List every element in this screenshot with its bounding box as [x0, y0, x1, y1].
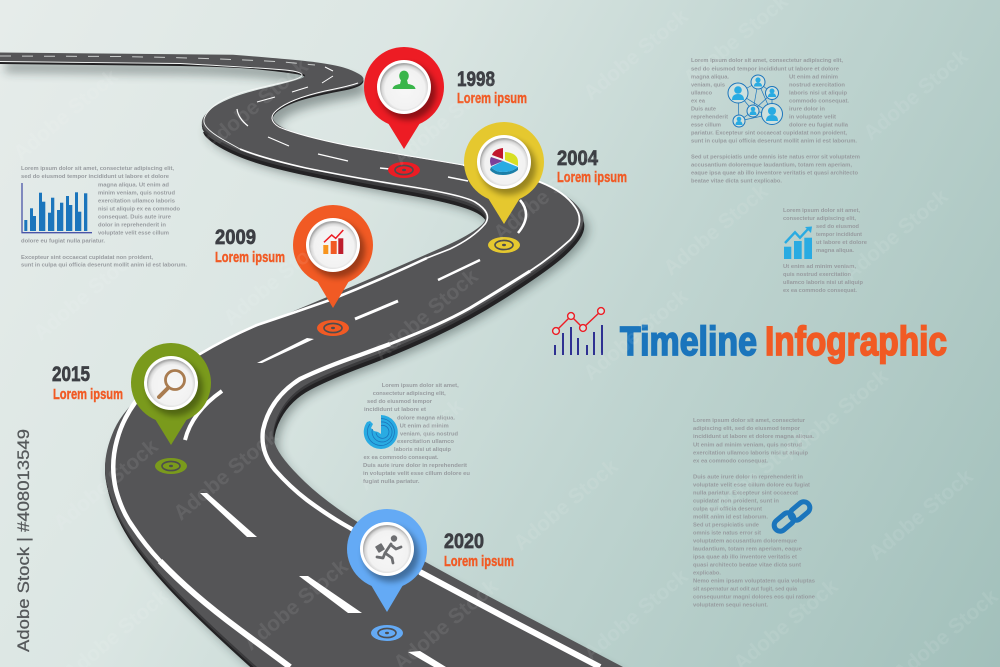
panel: text with network icon: eaque ipsa quae ab illo inventore veritatis et quasi architecto: [691, 170, 858, 176]
panel: text with bar chart: voluptate velit esse cillum: [98, 230, 169, 236]
watermark: Adobe Stock: [49, 435, 163, 535]
panel: text with bar chart: [21, 166, 187, 268]
panel: text with link icon: omnis iste natus error sit: [693, 530, 761, 536]
panel: text with growth icon: [783, 208, 868, 294]
panel: text with network icon: ex ea: [691, 98, 706, 104]
icon: magnifier: [159, 370, 184, 397]
panel: text with link icon: Sed ut perspiciatis unde: [693, 522, 760, 528]
panel: text with network icon: dolore eu fugiat nulla: [789, 122, 849, 128]
label: 2009: Lorem ipsum: [215, 249, 285, 266]
panel: text with link icon: adipiscing elit, sed do eiusmod tempor: [693, 426, 801, 432]
panel: text with network icon: irure dolor in: [789, 106, 825, 112]
target marker: 2020: [371, 625, 403, 641]
label: 2004: 2004: [557, 147, 598, 170]
panel: text with radial icon: sed do eiusmod tempor: [367, 399, 433, 405]
panel: text with radial icon: incididunt ut labore et: [364, 407, 426, 413]
panel: text with link icon: quasi architecto beatae vitae dicta sunt: [693, 562, 801, 568]
panel: text with bar chart: nisi ut aliquip ex ea commodo: [98, 206, 180, 212]
watermark: Adobe Stock: [859, 45, 973, 145]
panel: text with bar chart: exercitation ullamco laboris: [98, 198, 175, 204]
panel: text with link icon: ipsa quae ab illo inventore veritatis et: [693, 554, 797, 560]
panel: text with link icon: incididunt ut labore et dolore magna aliqua.: [693, 434, 814, 440]
panel: text with bar chart: dolor in reprehenderit in: [98, 222, 166, 228]
watermark: Adobe Stock: [839, 185, 953, 285]
panel: text with radial icon: veniam, quis nostrud: [400, 431, 458, 437]
label: 2009: [215, 226, 285, 266]
panel: text with link icon: Duis aute irure dolor in reprehenderit in: [693, 474, 803, 480]
watermark: Adobe Stock: [389, 70, 503, 170]
panel: text with bar chart: magna aliqua. Ut enim ad: [98, 182, 169, 188]
title text: Infographic: [765, 318, 947, 364]
panel: text with growth icon: ullamco laboris nisi ut aliquip: [783, 280, 863, 286]
watermark: Adobe Stock: [369, 265, 483, 365]
target marker: 2009: [317, 320, 349, 336]
watermark: Adobe Stock: [169, 425, 283, 525]
panel: text with growth icon: quis nostrud exercitation: [783, 272, 851, 278]
panel: text with growth icon: Lorem ipsum dolor sit amet,: [783, 208, 860, 214]
panel: text with growth icon: Ut enim ad minim veniam,: [783, 264, 856, 270]
watermark: Adobe Stock: [579, 565, 693, 665]
watermark: Adobe Stock: [864, 465, 978, 565]
panel: text with network icon: Sed ut perspiciatis unde omnis iste natus error sit voluptatem: [691, 154, 860, 160]
pin: 1998 person: [364, 47, 444, 149]
watermark: Adobe Stock: [9, 65, 123, 165]
panel: text with radial icon: [363, 383, 470, 485]
panel: text with network icon: Ut enim ad minim: [789, 75, 838, 81]
panel: text with network icon: magna aliqua.: [691, 75, 729, 81]
watermark: Adobe Stock: [489, 145, 603, 245]
panel: text with radial icon: fugiat nulla pariatur.: [363, 479, 420, 485]
icon: growth chart: [784, 226, 812, 259]
label: 2015: Lorem ipsum: [53, 386, 123, 403]
label: 1998: [457, 68, 527, 107]
pin: 2015 magnifier: [131, 343, 211, 445]
label: 2015: 2015: [52, 363, 90, 386]
panel: text with radial icon: Duis aute irure dolor in reprehenderit: [363, 463, 467, 469]
title text: Timeline: [620, 318, 757, 364]
panel: text with bar chart: minim veniam, quis nostrud: [98, 190, 175, 196]
pin: 2020 runner: [347, 509, 427, 612]
watermark: Adobe Stock: [579, 5, 693, 105]
panel: text with growth icon: consectetur adipiscing elit,: [783, 216, 856, 222]
title block: [553, 308, 947, 364]
panel: text with radial icon: dolore magna aliqua.: [397, 415, 455, 421]
label: 2020: Lorem ipsum: [444, 553, 514, 570]
road edge lines: [0, 62, 600, 667]
panel: text with network icon: pariatur. Excepteur sint occaecat cupidatat non proident,: [691, 130, 847, 136]
panel: text with radial icon: exercitation ullamco: [397, 439, 454, 445]
panel: text with network icon: reprehenderit: [691, 115, 728, 121]
panel: text with network icon: laboris nisi ut aliquip: [789, 90, 847, 96]
panel: text with growth icon: tempor incididunt: [816, 232, 862, 238]
label: 2004: Lorem ipsum: [557, 169, 627, 186]
watermark: Adobe Stock: [699, 425, 813, 525]
panel: text with bar chart: Lorem ipsum dolor sit amet, consectetur adipiscing elit,: [21, 166, 174, 172]
label: 1998: 1998: [457, 68, 495, 91]
icon: title line and bar chart: [553, 308, 604, 355]
icon: pie chart: [490, 148, 518, 175]
label: 2020: [444, 530, 514, 570]
panel: text with growth icon: ex ea commodo consequat.: [783, 288, 857, 294]
panel: text with link icon: voluptate velit esse cillum dolore eu fugiat: [693, 482, 810, 488]
panel: text with network icon: [691, 58, 860, 184]
panel: text with link icon: mollit anim id est laborum.: [693, 514, 768, 520]
label: 2020: 2020: [444, 530, 484, 553]
panel: text with bar chart: Excepteur sint occaecat cupidatat non proident,: [21, 255, 153, 261]
panel: text with link icon: exercitation ullamco laboris nisi ut aliquip: [693, 450, 808, 456]
panel: text with radial icon: ex ea commodo consequat.: [364, 455, 439, 461]
panel: text with network icon: accusantium doloremque laudantium, totam rem aperiam,: [691, 162, 852, 168]
panel: text with link icon: voluptatem sequi nesciunt.: [693, 602, 768, 608]
panel: text with growth icon: sed do eiusmod: [816, 224, 859, 230]
label: 2004: [557, 147, 627, 186]
target marker: 1998: [388, 162, 420, 178]
pin: 2004 pie chart: [464, 122, 544, 224]
panel: text with link icon: cupidatat non proident, sunt in: [693, 498, 779, 504]
watermark: Adobe Stock: [779, 365, 893, 465]
watermark: Adobe Stock: [354, 395, 468, 495]
watermark: Adobe Stock: [579, 285, 693, 385]
panel: text with link icon: Lorem ipsum dolor sit amet, consectetur: [693, 418, 806, 424]
panel: text with bar chart: sed do eiusmod tempor incididunt ut labore et dolore: [21, 174, 170, 180]
panel: text with radial icon: laboris nisi ut aliquip: [394, 447, 451, 453]
watermark: Adobe Stock: [199, 55, 313, 155]
icon: people network: [728, 75, 782, 127]
watermark: Adobe Stock: [509, 455, 623, 555]
panel: text with radial icon: Lorem ipsum dolor sit amet,: [382, 383, 459, 389]
panel: text with link icon: ex ea commodo consequat.: [693, 458, 768, 464]
target marker: 2015: [155, 458, 187, 474]
panel: text with network icon: nostrud exercitation: [789, 82, 845, 88]
watermark: Adobe Stock: [219, 230, 333, 330]
vertical stock id text: Adobe Stock | #408013549: [15, 429, 33, 652]
panel: text with link icon: explicabo.: [693, 570, 721, 576]
panel: text with network icon: esse cillum: [691, 122, 721, 128]
panel: text with link icon: Ut enim ad minim veniam, quis nostrud: [693, 442, 802, 448]
panel: text with network icon: Lorem ipsum dolor sit amet, consectetur adipiscing elit,: [691, 58, 843, 64]
target marker: 2004: [488, 237, 520, 253]
panel: text with link icon: [693, 418, 816, 608]
panel: text with network icon: veniam, quis: [691, 82, 725, 88]
panel: text with network icon: commodo consequat.: [789, 98, 849, 104]
panel: text with radial icon: Ut enim ad minim: [400, 423, 449, 429]
panel: text with growth icon: ut labore et dolore: [816, 240, 868, 246]
road centre dashes: [0, 56, 526, 667]
panel: text with network icon: Duis aute: [691, 106, 717, 112]
icon: growth bars: [323, 230, 343, 254]
panel: text with link icon: Nemo enim ipsam voluptatem quia voluptas: [693, 578, 815, 584]
panel: text with radial icon: consectetur adipiscing elit,: [373, 391, 446, 397]
panel: text with growth icon: magna aliqua.: [816, 248, 854, 254]
label: 1998: Lorem ipsum: [457, 90, 527, 107]
panel: text with bar chart: dolore eu fugiat nulla pariatur.: [21, 238, 105, 244]
watermark: Adobe Stock: [29, 245, 143, 345]
icon: chain link: [772, 499, 812, 534]
panel: text with radial icon: in voluptate velit esse cillum dolore eu: [363, 471, 470, 477]
panel: text with network icon: sunt in culpa qui officia deserunt mollit anim id est laborum.: [691, 138, 857, 144]
panel: text with link icon: laudantium, totam rem aperiam, eaque: [693, 546, 803, 552]
icon: runner: [376, 535, 401, 563]
watermark: Adobe Stock: [659, 180, 773, 280]
panel: text with link icon: nulla pariatur. Excepteur sint occaecat: [693, 490, 798, 496]
panel: text with link icon: sit aspernatur aut odit aut fugit, sed quia: [693, 586, 798, 592]
watermark: Adobe Stock: [239, 555, 353, 655]
road: [0, 52, 645, 667]
panel: text with link icon: voluptatem accusantium doloremque: [693, 538, 798, 544]
pin: 2009 growth bars: [293, 205, 373, 308]
icon: person: [392, 71, 416, 89]
panel: text with link icon: culpa qui officia deserunt: [693, 506, 762, 512]
label: 2015: [52, 363, 123, 403]
icon: radial chart: [364, 415, 398, 449]
panel: text with network icon: beatae vitae dicta sunt explicabo.: [691, 178, 782, 184]
panel: text with network icon: sed do eiusmod tempor incididunt ut labore et dolore: [691, 66, 840, 72]
label: 2009: 2009: [215, 226, 256, 249]
panel: text with link icon: consequuntur magni dolores eos qui ratione: [693, 594, 816, 600]
panel: text with network icon: ullamco: [691, 90, 712, 96]
panel: text with bar chart: consequat. Duis aute irure: [98, 214, 172, 220]
icon: bar chart: [22, 183, 92, 233]
panel: text with network icon: in voluptate velit: [789, 115, 836, 121]
panel: text with bar chart: sunt in culpa qui officia deserunt mollit anim id est laborum.: [21, 262, 187, 268]
